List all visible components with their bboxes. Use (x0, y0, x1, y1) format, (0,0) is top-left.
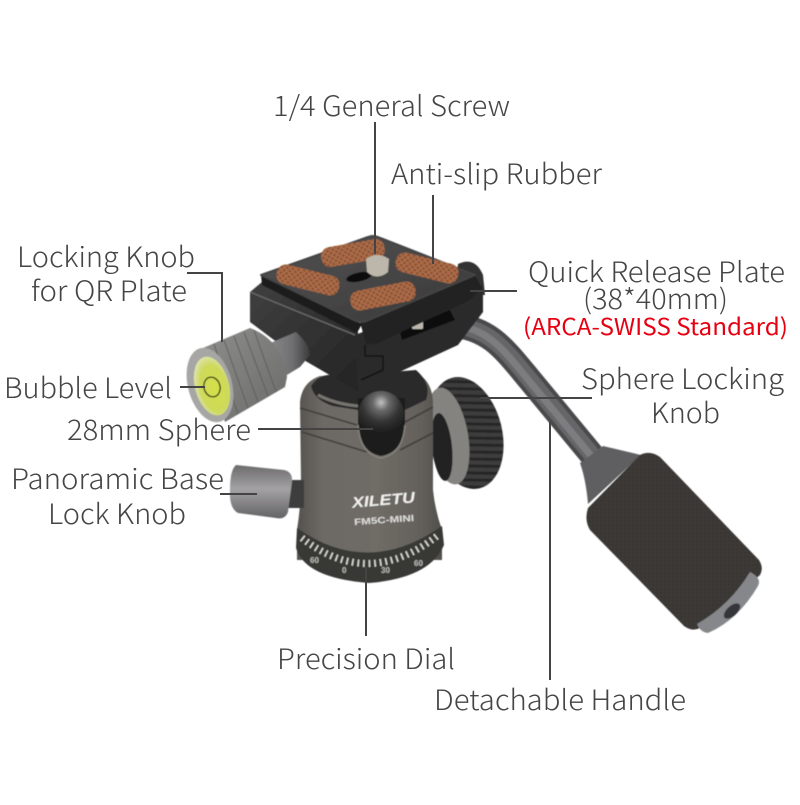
label: 28mm Sphere: 28mm Sphere (67, 409, 251, 449)
knurl rib lines (214, 330, 276, 414)
panoramic lock stem (282, 480, 304, 508)
knob collar inner (429, 412, 455, 482)
dial numbers: 60 (310, 556, 319, 565)
clamp screw (412, 320, 423, 329)
screw slot (345, 270, 373, 284)
rubber pad top (320, 238, 386, 268)
head body (297, 372, 442, 560)
sphere slot (358, 398, 405, 456)
locking knob stem (268, 332, 310, 378)
label: Precision Dial: Precision Dial (277, 638, 455, 678)
clamp notch (361, 345, 383, 380)
QR plate top (261, 236, 475, 322)
sphere (358, 391, 404, 437)
label: for QR Plate: for QR Plate (31, 270, 187, 310)
label: Sphere Locking: Sphere Locking (581, 358, 784, 398)
label: Locking Knob: Locking Knob (17, 236, 195, 276)
product photo: ball head (179, 236, 762, 633)
body groove lines (300, 407, 433, 452)
clamp right face (355, 285, 483, 391)
QR plate bevel (261, 275, 362, 333)
label: Anti-slip Rubber: Anti-slip Rubber (391, 153, 603, 193)
foam grip (586, 453, 762, 630)
dial numbers: 60 (414, 559, 423, 568)
sphere locking knob (417, 369, 515, 497)
label: plate size: (38*40mm) (583, 278, 728, 318)
dial base (296, 526, 444, 583)
dial numbers: 30 (381, 566, 390, 575)
rubber pad right (394, 251, 460, 285)
socket dark ring (311, 370, 428, 410)
leader lines (180, 122, 592, 680)
locking knob knurled body (203, 328, 287, 422)
dial numbers (310, 556, 423, 575)
dial ticks (302, 536, 437, 564)
model name: FM5C-MINI (354, 513, 414, 527)
rear plate knob (455, 262, 485, 295)
rubber pad left (275, 263, 341, 297)
rubber pad front (349, 280, 417, 312)
dial numbers: 0 (342, 566, 347, 575)
panoramic lock knob (230, 465, 292, 518)
handle end cap (697, 572, 759, 633)
label: Detachable Handle: Detachable Handle (434, 679, 686, 719)
label: Quick Release Plate: Quick Release Plate (528, 251, 785, 291)
slot lip (358, 425, 405, 458)
clamp top edge highlight (250, 292, 355, 335)
handle end socket (721, 601, 743, 621)
locking knob face (179, 343, 241, 427)
handle tube (452, 325, 592, 457)
clamp slot (400, 310, 455, 340)
1/4 screw (366, 255, 389, 276)
label: Panoramic Base: Panoramic Base (11, 458, 224, 498)
QR plate side (360, 275, 482, 344)
handle cone (580, 446, 641, 504)
brand logo: XILETU (350, 489, 417, 512)
clamp left face (250, 282, 358, 391)
label: 1/4 General Screw: 1/4 General Screw (273, 85, 510, 125)
bubble level vial (188, 353, 236, 419)
ribbed knob wheel (417, 369, 515, 497)
label: Bubble Level: Bubble Level (4, 367, 172, 407)
label: ARCA-SWISS Standard: (ARCA-SWISS Standard) (523, 308, 788, 342)
label: Knob: Knob (651, 392, 720, 432)
socket inner highlight (318, 395, 358, 406)
knob collar ring (420, 384, 476, 488)
bubble ring (202, 375, 222, 399)
label: Lock Knob: Lock Knob (48, 493, 186, 533)
